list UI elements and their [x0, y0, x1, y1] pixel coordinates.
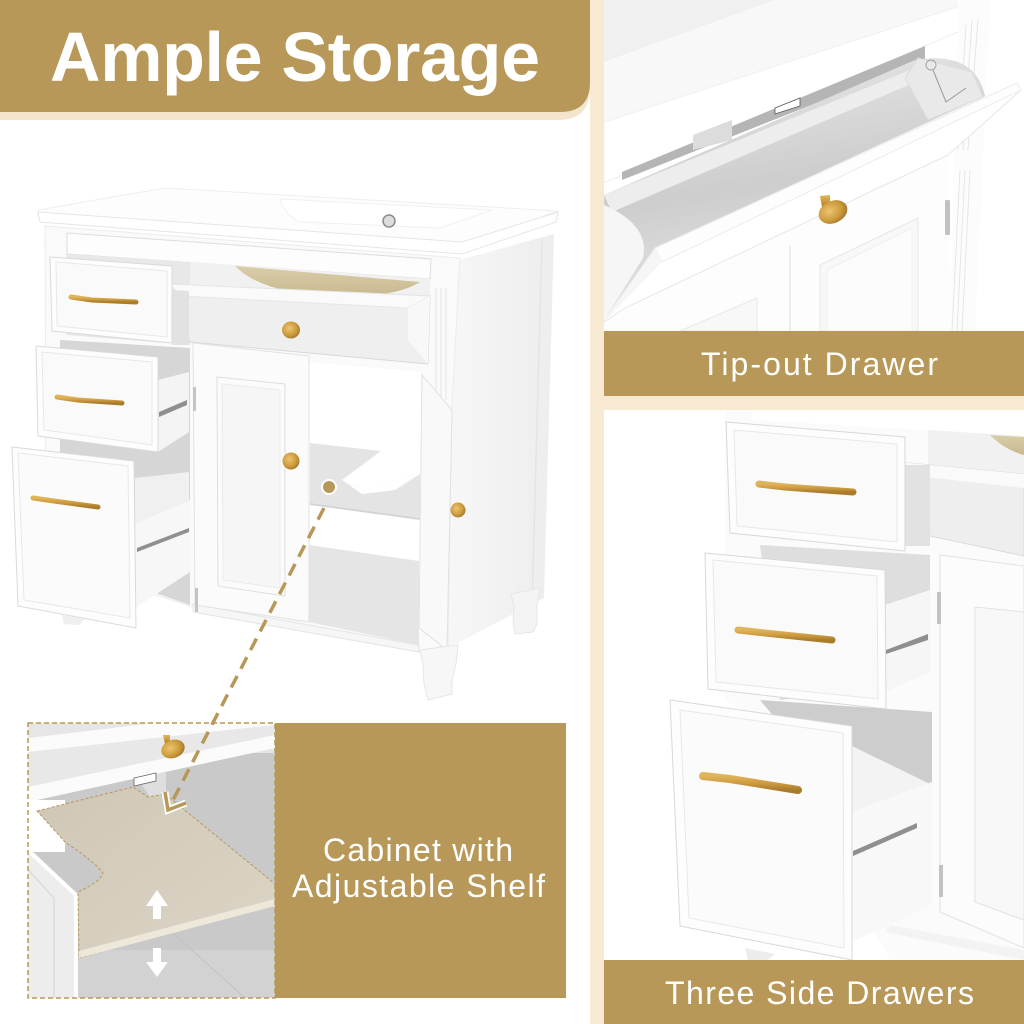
tip-out drawer photo	[604, 0, 1024, 331]
rail	[604, 6, 960, 183]
vanity cabinet front frame	[45, 226, 460, 652]
down arrow	[146, 948, 168, 977]
faucet hole	[383, 215, 395, 227]
top rail	[752, 410, 1024, 436]
pilaster flutes	[436, 288, 446, 400]
adjustable shelf in cabinet	[310, 443, 420, 518]
back leg	[511, 588, 540, 634]
sink bowl	[235, 266, 420, 297]
tip-out drawer	[170, 284, 430, 364]
tip-out crop	[899, 462, 1024, 556]
dashed panel border	[28, 723, 275, 998]
middle drawer	[705, 545, 930, 709]
slot vent	[775, 98, 800, 114]
right column separator	[590, 0, 1024, 1024]
cabinet bottom	[309, 545, 419, 645]
sink bowl crop	[990, 435, 1024, 455]
counter top	[38, 188, 558, 246]
right cabinet door	[419, 375, 466, 650]
beige shelf	[37, 787, 275, 958]
up arrow	[146, 890, 168, 919]
header banner	[0, 0, 590, 120]
detail photo	[28, 723, 275, 998]
top rail	[67, 233, 431, 279]
title: Ample Storage	[50, 18, 540, 96]
middle left drawer	[36, 346, 189, 452]
three side drawers caption strip	[604, 960, 1024, 1024]
main vanity illustration	[12, 188, 558, 700]
three side drawers photo	[670, 410, 1024, 960]
door crop	[940, 555, 1024, 948]
leader arrow head	[165, 792, 186, 810]
top drawer	[726, 422, 930, 551]
three side drawers caption strip: Three Side Drawers	[665, 975, 974, 1011]
vanity right side panel	[448, 234, 554, 648]
frame background	[725, 410, 1024, 960]
tip-out flap	[604, 83, 1021, 322]
sensor slot	[134, 773, 156, 786]
detail panel: adjustable shelf	[28, 723, 566, 998]
bin label tag	[905, 58, 983, 120]
drawer bin	[604, 58, 985, 320]
leader dot	[322, 480, 336, 494]
top left drawer	[50, 257, 189, 345]
tip-out knob	[815, 195, 851, 228]
shelf caption: Adjustable Shelf	[292, 868, 545, 904]
tip-out caption strip: Tip-out Drawer	[701, 346, 938, 382]
openings behind drawers	[66, 254, 190, 345]
tip-out caption strip	[604, 331, 1024, 396]
dark slot	[622, 46, 925, 180]
shelf caption: Cabinet with	[323, 832, 513, 868]
front leg	[420, 645, 458, 700]
shelf caption	[292, 832, 545, 904]
counter underside	[604, 0, 775, 62]
door area	[604, 155, 950, 331]
cabinet open interior	[309, 362, 421, 632]
opening by tip-out	[928, 430, 1024, 480]
knob	[159, 735, 187, 762]
dashed leader arrow	[165, 480, 336, 810]
left cabinet door	[193, 343, 309, 622]
bottom drawer	[670, 700, 932, 960]
fluted pilaster	[950, 0, 990, 331]
bottom left drawer	[12, 447, 190, 628]
basin	[280, 199, 492, 228]
